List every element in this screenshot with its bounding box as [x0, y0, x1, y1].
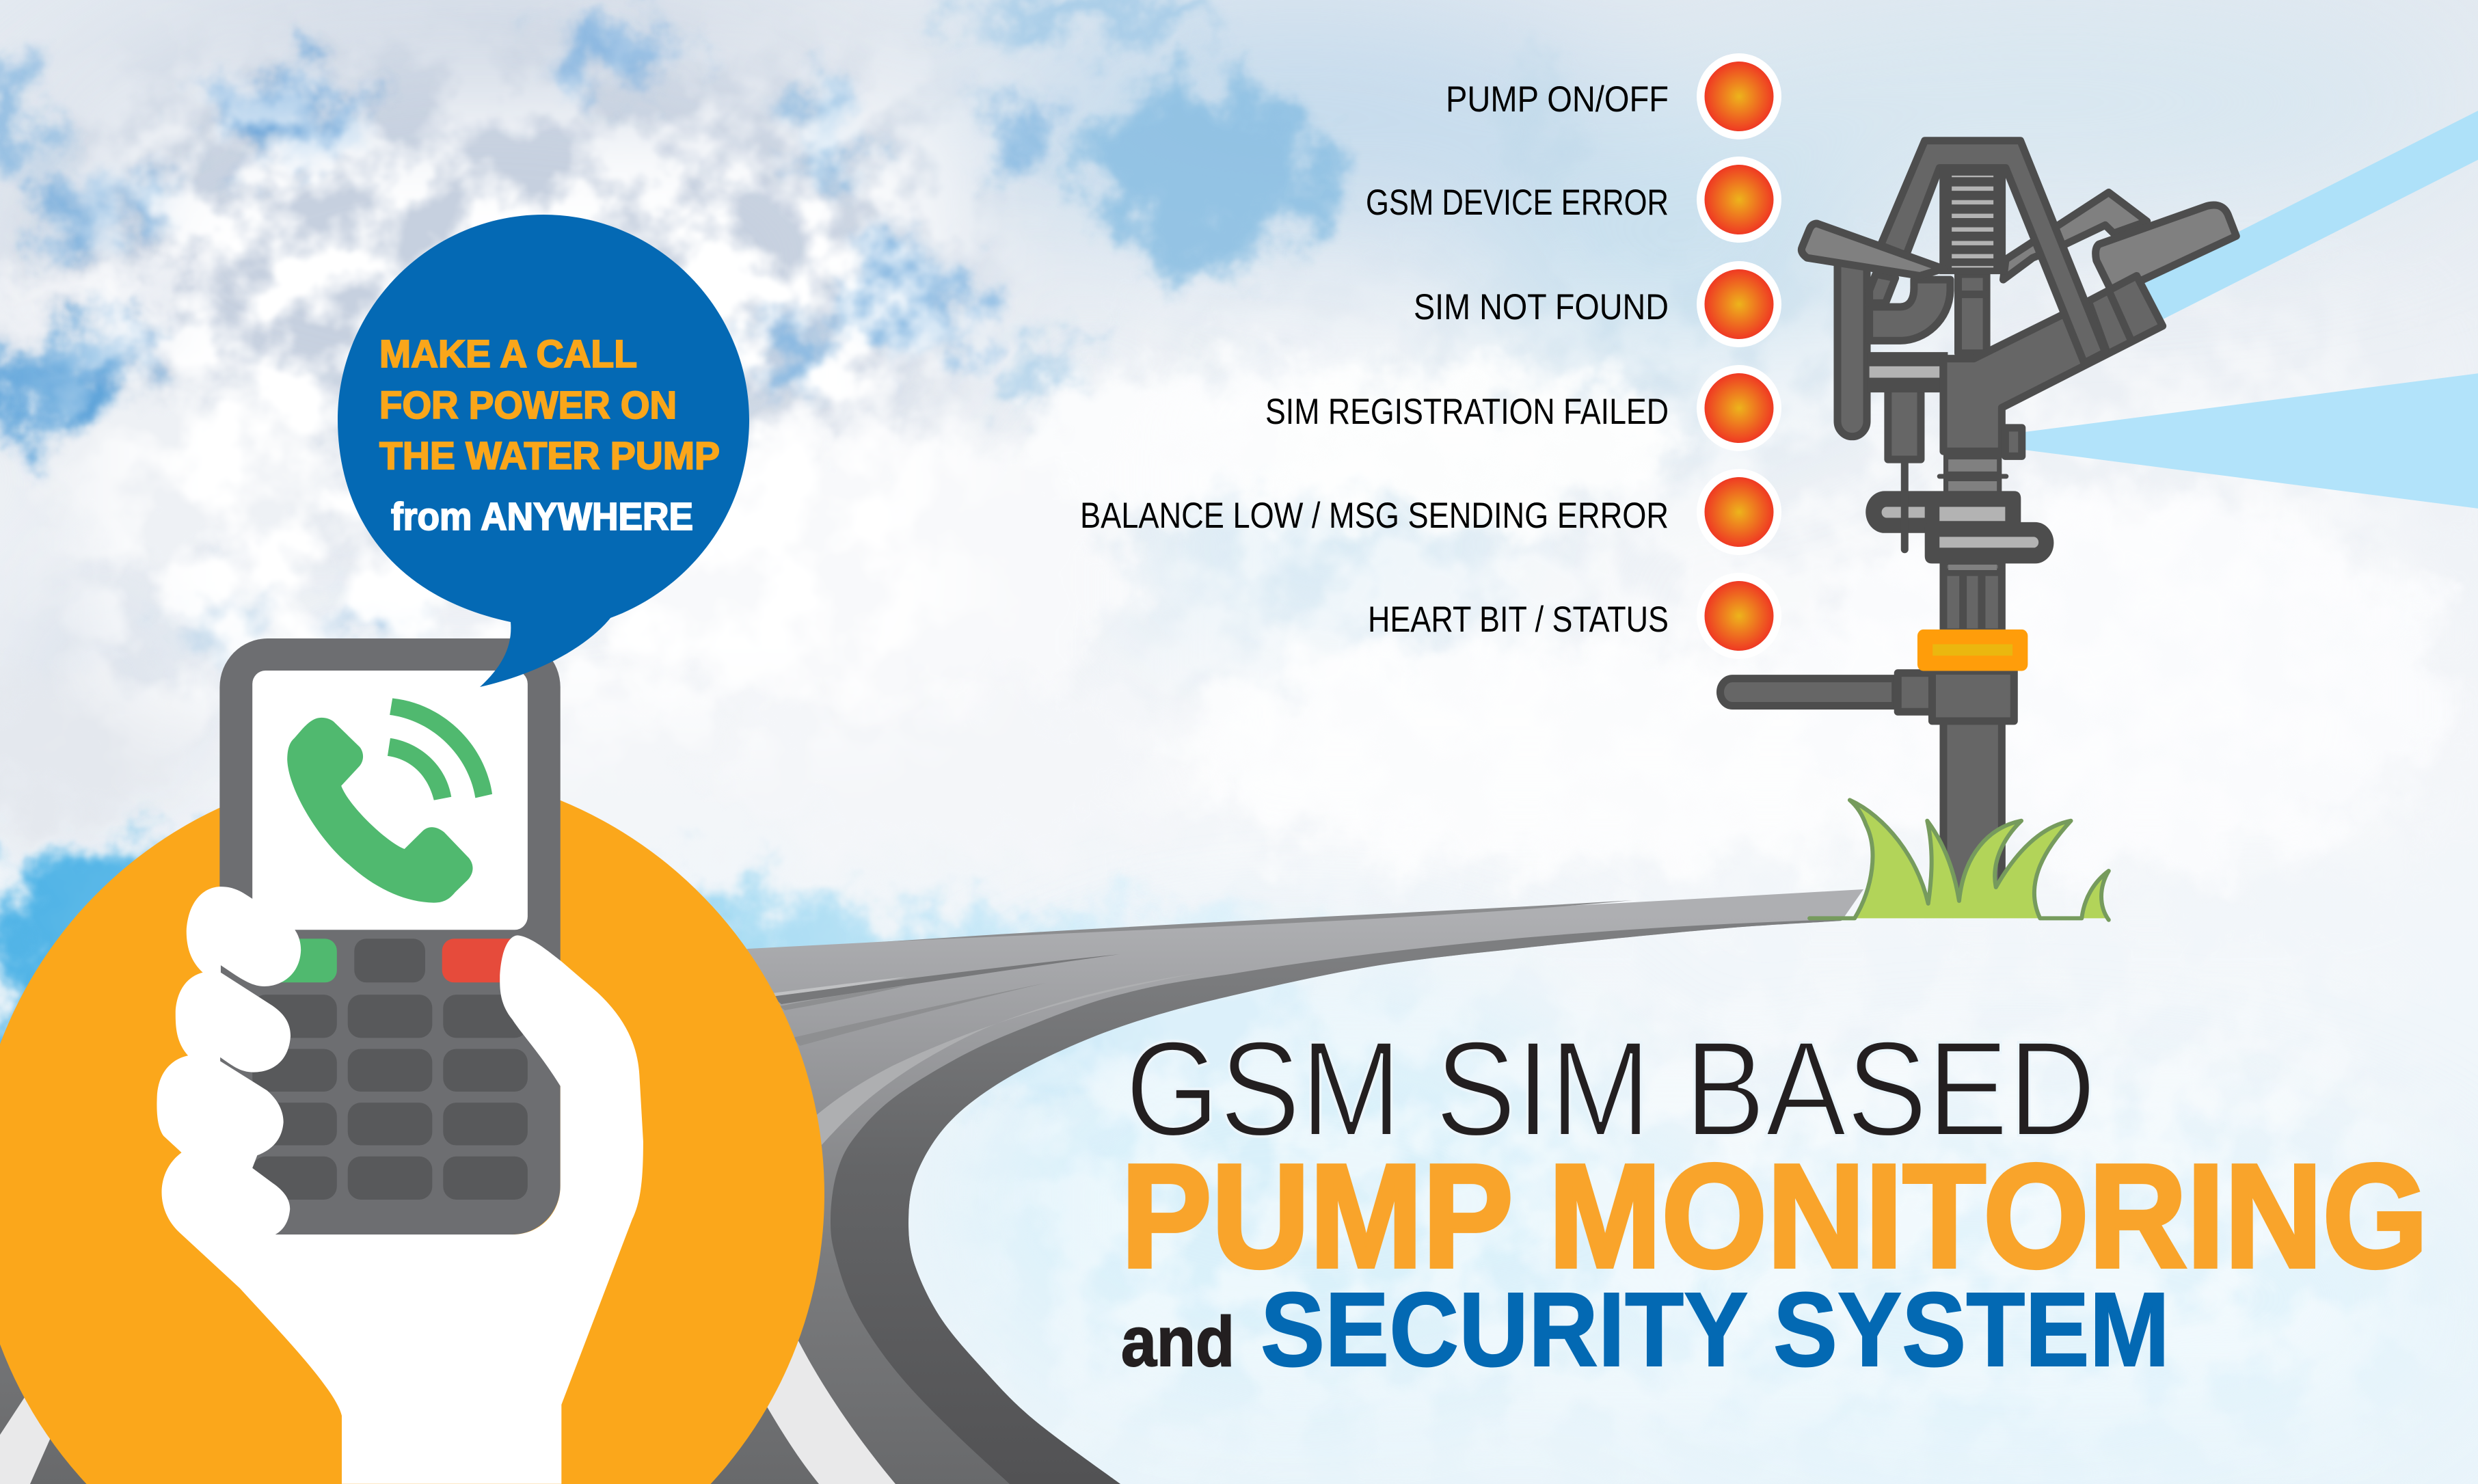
lower collar insert: [1939, 537, 2038, 548]
status list: [1080, 53, 1781, 659]
faint road streak: [793, 983, 1046, 1046]
status: sim registration failed: [1265, 365, 1781, 451]
arm frame: [1881, 141, 2105, 363]
status: sim not found: [1414, 261, 1781, 347]
status: gsm device error: [1366, 157, 1781, 243]
bubble text: MAKE A CALL: [379, 332, 637, 376]
bubble text: THE WATER PUMP: [379, 434, 720, 478]
road surface: [0, 889, 1863, 1484]
dark road streak: [772, 954, 1120, 1004]
upper road streak: [882, 900, 1632, 942]
icon: handset: [287, 718, 473, 903]
small brace: [1870, 274, 1896, 303]
clamp inner strip: [1932, 644, 2012, 656]
top spindle: [1958, 274, 1987, 353]
ribbed section: [1943, 561, 2002, 632]
bubble text: from ANYWHERE: [391, 495, 693, 539]
upper collar: [1866, 491, 2021, 533]
dark shoulder band: [831, 919, 1842, 1484]
elbow pipe: [1870, 280, 1950, 340]
orange circle: [0, 768, 824, 1484]
spindle line: [1959, 291, 1986, 298]
lower collar: [1932, 671, 2014, 721]
status: balance low: [1080, 469, 1781, 555]
grass fill: [1850, 800, 2109, 918]
cloud texture lower: [1025, 991, 2393, 1415]
light road streak: [772, 977, 907, 996]
side bar block: [1867, 352, 1948, 392]
white lane stripe left: [0, 1393, 52, 1484]
nozzle barrel: [2096, 205, 2236, 291]
sub block: [1888, 389, 1921, 459]
bubble text: FOR POWER ON: [379, 383, 677, 427]
jet from spout: [2023, 373, 2478, 509]
upper collar inserts: [1882, 507, 2005, 521]
left rocker: [1801, 224, 1943, 276]
title line 3 security system: SECURITY SYSTEM: [1261, 1271, 2170, 1388]
large blue sky patch: [1092, 79, 1325, 263]
status: heart bit: [1368, 573, 1781, 659]
icon: call signal: [388, 699, 492, 800]
arm body: [1943, 276, 2163, 451]
side bar strip: [1870, 366, 1939, 378]
sky patches: [0, 0, 1559, 638]
end key: [442, 939, 528, 982]
bubble shape: [338, 215, 749, 687]
bubble text: [379, 332, 720, 539]
white lane stripe right: [752, 1316, 895, 1484]
hand: [157, 887, 643, 1484]
neck bands: [1948, 459, 1997, 570]
lower collar band: [1925, 522, 2053, 563]
horizon blue sky: [0, 854, 1299, 1094]
call key: [252, 939, 337, 982]
status: sim registration failed: SIM REGISTRATION FAILED: [1265, 392, 1669, 432]
block stripes: [1952, 176, 1993, 268]
rod: [1901, 459, 1909, 550]
status: pump on/off: [1446, 53, 1781, 139]
sprinkler: [1721, 111, 2478, 904]
phone body: [219, 638, 561, 1235]
phone screen: [252, 671, 528, 930]
side arm pipe: [1721, 679, 1896, 706]
lower pipe: [1943, 718, 2002, 904]
rear rocker arm: [2003, 193, 2147, 280]
cloud masses: [0, 263, 2447, 875]
hanging bar: [1837, 260, 1867, 437]
grass: [1809, 800, 2109, 920]
grass outline: [1809, 800, 2109, 920]
title line 1: GSM SIM BASED: [1125, 1013, 2096, 1164]
status: balance low: BALANCE LOW / MSG SENDING ERROR: [1080, 496, 1669, 536]
status: gsm device error: GSM DEVICE ERROR: [1366, 183, 1669, 223]
spout: [2005, 428, 2022, 456]
title: [1121, 1013, 2428, 1388]
status: heart bit: HEART BIT / STATUS: [1368, 599, 1669, 640]
cloud texture top left: [103, 103, 957, 718]
cloud texture right: [1162, 328, 2393, 854]
light lane stripe: [813, 973, 1200, 1145]
orange clamp: [1917, 630, 2028, 671]
neck line: [1939, 474, 2006, 478]
arm ribs: [2089, 291, 2131, 351]
centre block: [1939, 168, 2006, 274]
side arm connector: [1898, 673, 1932, 712]
jet behind nozzle upper: [2143, 111, 2478, 319]
phone: [219, 638, 561, 1235]
lower road streak: [779, 986, 907, 1010]
status: sim not found: SIM NOT FOUND: [1414, 287, 1669, 327]
road: [0, 889, 1863, 1484]
keypad: [252, 939, 528, 1200]
neck section: [1943, 446, 2002, 498]
speech bubble: [338, 215, 749, 687]
status: pump on/off: PUMP ON/OFF: [1446, 79, 1669, 120]
title line 3 and: and: [1121, 1302, 1235, 1381]
